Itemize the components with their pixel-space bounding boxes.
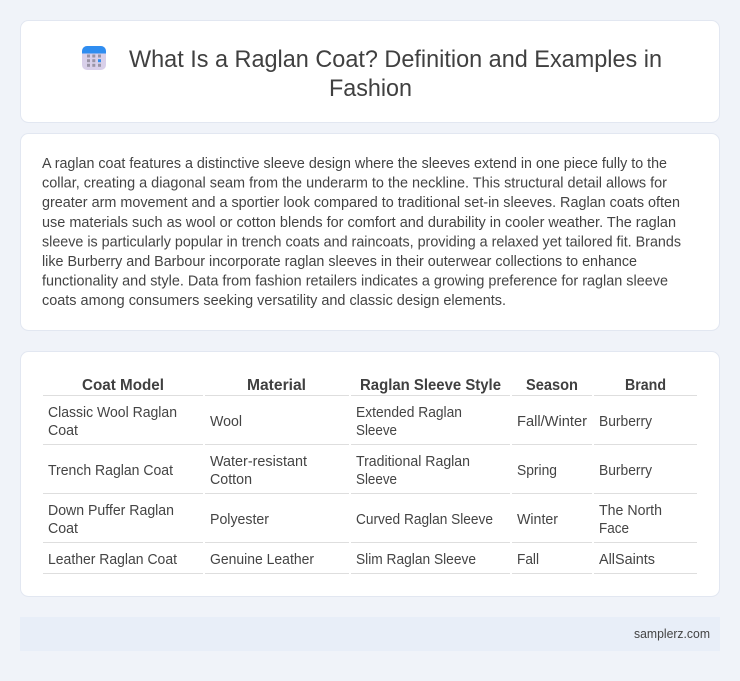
table row: Leather Raglan Coat: Genuine Leather — [210, 552, 314, 568]
footer bar — [20, 617, 720, 651]
table header row: Brand — [625, 377, 666, 394]
table row: Down Puffer Raglan Coat: Coat — [48, 521, 78, 537]
text block: raglan coat definition: collar, creating a diagonal seam from the underarm to the neckline. This structural detail allows for — [42, 176, 667, 192]
table header row: Material — [247, 377, 306, 394]
table row: Down Puffer Raglan Coat: The North — [599, 503, 662, 519]
table row: Trench Raglan Coat: Cotton — [210, 472, 252, 488]
text block: raglan coat definition: coats among consumers seeking versatility and classic design elements. — [42, 293, 506, 309]
text block: raglan coat definition: functionality and style. Data from fashion retailers indicates a growing preference for raglan sleeve — [42, 274, 668, 290]
text block: raglan coat definition: sleeve is particularly popular in trench coats and raincoats, providing a relaxed yet tailored fit. Brands — [42, 234, 681, 250]
table row: Trench Raglan Coat — [43, 454, 697, 494]
table row: Trench Raglan Coat: Water-resistant — [210, 454, 307, 470]
text block: raglan coat definition: greater arm movement and a sportier look compared to traditional set-in sleeves. Raglan coats often — [42, 195, 680, 211]
table header row: Raglan Sleeve Style — [360, 377, 501, 394]
table row: Trench Raglan Coat: Traditional Raglan — [356, 454, 470, 470]
table row: Leather Raglan Coat: Slim Raglan Sleeve — [356, 552, 476, 568]
panel: title card — [20, 20, 720, 122]
panel: description — [20, 134, 720, 330]
table row: Classic Wool Raglan Coat: Sleeve — [356, 423, 397, 439]
table row: Classic Wool Raglan Coat: Classic Wool Raglan — [48, 405, 177, 421]
icon: calendar — [82, 46, 106, 70]
footer source text: samplerz.com — [634, 627, 710, 641]
panel: coat comparison table — [20, 352, 720, 596]
text block: raglan coat definition: A raglan coat features a distinctive sleeve design where the sleeves extend in one piece fully to the — [42, 156, 667, 172]
table row: Down Puffer Raglan Coat: Face — [599, 521, 629, 537]
table row: Leather Raglan Coat: Leather Raglan Coat — [48, 552, 177, 568]
text block: raglan coat definition: like Burberry and Barbour incorporate raglan sleeves in their outerwear collections to enhance — [42, 254, 637, 270]
table row: Down Puffer Raglan Coat: Curved Raglan Sleeve — [356, 512, 493, 528]
title: What Is a Raglan Coat? Definition and Examples in — [129, 46, 662, 73]
table header row — [43, 377, 697, 396]
title — [129, 46, 662, 102]
text block: raglan coat definition — [42, 156, 681, 309]
table row: Classic Wool Raglan Coat: Coat — [48, 423, 78, 439]
table row: Down Puffer Raglan Coat: Polyester — [210, 512, 269, 528]
title: Fashion — [329, 75, 412, 102]
table row: Classic Wool Raglan Coat: Burberry — [599, 414, 653, 430]
table row: Trench Raglan Coat: Sleeve — [356, 472, 397, 488]
table row: Down Puffer Raglan Coat: Down Puffer Raglan — [48, 503, 174, 519]
table row: Classic Wool Raglan Coat — [43, 405, 697, 445]
table row: Classic Wool Raglan Coat: Extended Raglan — [356, 405, 462, 421]
table header row: Season — [526, 377, 578, 394]
table row: Down Puffer Raglan Coat — [43, 503, 697, 543]
table row: Down Puffer Raglan Coat: Winter — [517, 512, 558, 528]
table row: Trench Raglan Coat: Burberry — [599, 463, 653, 479]
table header row: Coat Model — [82, 377, 164, 394]
text block: raglan coat definition: use materials such as wool or cotton blends for comfort and durability in cooler weather. The raglan — [42, 215, 676, 231]
table row: Leather Raglan Coat — [43, 552, 697, 574]
table row: Trench Raglan Coat: Trench Raglan Coat — [48, 463, 173, 479]
table row: Leather Raglan Coat: Fall — [517, 552, 539, 568]
table row: Classic Wool Raglan Coat: Wool — [210, 414, 242, 430]
table row: Leather Raglan Coat: AllSaints — [599, 552, 655, 568]
table row: Trench Raglan Coat: Spring — [517, 463, 557, 479]
table row: Classic Wool Raglan Coat: Fall/Winter — [517, 414, 587, 430]
